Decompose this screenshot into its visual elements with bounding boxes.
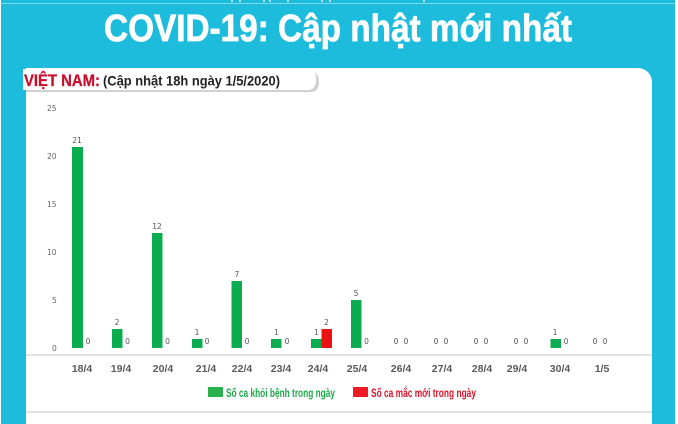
y axis labels: 20 <box>47 152 57 161</box>
value labels: 0 <box>165 337 170 346</box>
heading label: Việt Nam <box>23 69 319 92</box>
y axis labels <box>47 104 57 353</box>
value labels: 0 <box>245 337 250 346</box>
value labels <box>72 136 608 346</box>
x axis labels: 20/4 <box>153 363 173 375</box>
y axis labels: 0 <box>52 344 57 353</box>
value labels: 12 <box>152 222 162 231</box>
value labels: 0 <box>474 337 479 346</box>
y axis labels: 5 <box>52 296 57 305</box>
value labels: 1 <box>314 328 319 337</box>
legend: recovered: Số ca khỏi bệnh trong ngày <box>226 386 335 400</box>
value labels: 0 <box>125 337 130 346</box>
value labels: 0 <box>484 337 489 346</box>
value labels: 0 <box>394 337 399 346</box>
value labels: 0 <box>564 337 569 346</box>
value labels: 2 <box>324 318 329 327</box>
value labels: 0 <box>285 337 290 346</box>
y axis labels: 15 <box>47 200 57 209</box>
y axis labels: 25 <box>47 104 57 113</box>
x axis labels: 25/4 <box>347 363 367 375</box>
heading label: Việt Nam: VIỆT NAM: <box>24 71 100 90</box>
panel: chart card <box>26 68 652 424</box>
value labels: 0 <box>603 337 608 346</box>
legend: new cases <box>353 385 476 400</box>
x axis labels: 19/4 <box>111 363 131 375</box>
x axis labels: 27/4 <box>432 363 452 375</box>
value labels: 0 <box>434 337 439 346</box>
x axis labels: 24/4 <box>308 363 328 375</box>
legend: new cases: Số ca mắc mới trong ngày <box>371 385 476 400</box>
x axis labels: 23/4 <box>271 363 291 375</box>
legend: recovered <box>208 386 335 400</box>
x axis labels: 29/4 <box>507 363 527 375</box>
value labels: 0 <box>364 337 369 346</box>
x axis labels <box>72 363 609 375</box>
x axis labels: 28/4 <box>472 363 492 375</box>
value labels: 21 <box>72 136 82 145</box>
value labels: 0 <box>514 337 519 346</box>
value labels: 2 <box>115 318 120 327</box>
value labels: 0 <box>404 337 409 346</box>
value labels: 1 <box>553 328 558 337</box>
x axis labels: 21/4 <box>196 363 216 375</box>
x axis labels: 18/4 <box>72 363 92 375</box>
x axis labels: 26/4 <box>391 363 411 375</box>
value labels: 1 <box>195 328 200 337</box>
x axis labels: 22/4 <box>232 363 252 375</box>
bars: recovered cases per day <box>72 147 561 348</box>
y axis labels: 10 <box>47 248 57 257</box>
value labels: 0 <box>205 337 210 346</box>
x axis labels: 1/5 <box>595 363 609 375</box>
value labels: 0 <box>444 337 449 346</box>
value labels: 5 <box>354 289 359 298</box>
x axis labels: 30/4 <box>550 363 570 375</box>
title: COVID-19: Cập nhật mới nhất <box>104 8 572 50</box>
heading label: Việt Nam: (Cập nhật 18h ngày 1/5/2020) <box>103 74 280 88</box>
value labels: 0 <box>524 337 529 346</box>
value labels: 0 <box>86 337 91 346</box>
value labels: 7 <box>235 270 240 279</box>
value labels: 1 <box>274 328 279 337</box>
value labels: 0 <box>593 337 598 346</box>
bar: new cases 24/4 <box>322 329 332 348</box>
